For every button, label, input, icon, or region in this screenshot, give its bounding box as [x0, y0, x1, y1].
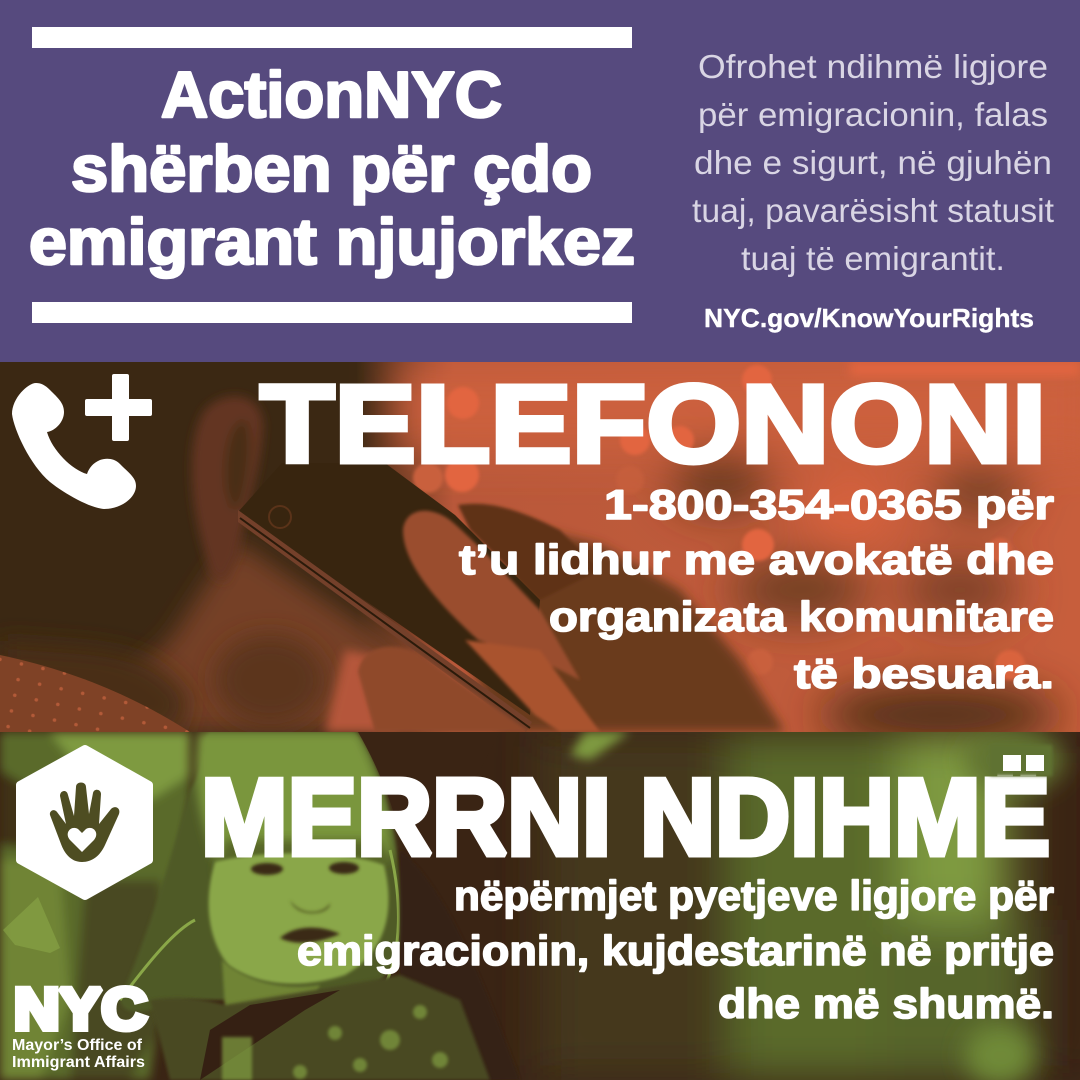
- phone: [238, 463, 540, 732]
- icon: phone with plus: [12, 374, 152, 509]
- photo: man holding a phone: [0, 362, 1080, 745]
- help description text: emigracionin, kujdestarinë në pritje: [297, 927, 1054, 974]
- help description text: dhe më shumë.: [718, 980, 1054, 1027]
- panel: purple header: [0, 0, 1080, 362]
- description text: tuaj të emigrantit.: [741, 240, 1005, 277]
- heading: ActionNYC serves every immigrant New Yorker: emigrant njujorkez: [29, 205, 635, 278]
- call description text: [459, 481, 1054, 697]
- backpack badge: [3, 897, 60, 953]
- description text: dhe e sigurt, në gjuhën: [694, 144, 1052, 181]
- bottom white bar: [32, 302, 632, 323]
- ear: [192, 396, 263, 582]
- call description text: t’u lidhur me avokatë dhe: [459, 536, 1054, 583]
- logo: NYC Mayor's Office of Immigrant Affairs: [12, 977, 147, 1071]
- description text: Ofrohet ndihmë ligjore: [698, 48, 1048, 85]
- neck and jaw: [138, 536, 388, 732]
- heading: ActionNYC serves every immigrant New Yorker: ActionNYC: [161, 58, 502, 131]
- heading: ActionNYC serves every immigrant New Yorker: [29, 58, 635, 278]
- call description text: të besuara.: [794, 650, 1054, 697]
- call description text: organizata komunitare: [549, 593, 1054, 640]
- panel: orange call section with phone photo: [0, 362, 1080, 745]
- website link: NYC.gov/KnowYourRights: [704, 303, 1034, 333]
- description text: për emigracionin, falas: [698, 96, 1048, 133]
- fingers: [358, 511, 600, 732]
- top white bar: [32, 27, 632, 48]
- heading: MERRNI NDIHMË: MERRNI NDIHMË: [201, 756, 1050, 878]
- hair on right: [398, 864, 406, 950]
- description text: [692, 48, 1054, 277]
- shirt collar: [0, 655, 190, 732]
- help description text: [297, 872, 1054, 1027]
- heading: ActionNYC serves every immigrant New Yorker: shërben për çdo: [71, 132, 592, 205]
- icon: hexagon with hand and heart: [20, 749, 149, 896]
- hood: [120, 732, 404, 1012]
- panel: green get-help section with child photo: [0, 728, 1080, 1080]
- face: [209, 853, 389, 984]
- description text: tuaj, pavarësisht statusit: [692, 192, 1054, 229]
- photo: child in a hood: [0, 728, 1080, 1080]
- call description text: 1-800-354-0365 për: [604, 481, 1054, 528]
- heading: TELEFONONI: TELEFONONI: [260, 363, 1046, 486]
- logo: NYC Mayor's Office of Immigrant Affairs: Mayor’s Office of: [12, 1037, 143, 1054]
- logo: NYC Mayor's Office of Immigrant Affairs: Immigrant Affairs: [12, 1054, 145, 1071]
- heart: [68, 828, 96, 852]
- coat: [150, 975, 490, 1080]
- help description text: nëpërmjet pyetjeve ligjore për: [454, 872, 1054, 919]
- hand behind phone: [458, 504, 785, 732]
- logo: NYC Mayor's Office of Immigrant Affairs: NYC: [14, 977, 147, 1042]
- hand cut-out: [50, 782, 119, 862]
